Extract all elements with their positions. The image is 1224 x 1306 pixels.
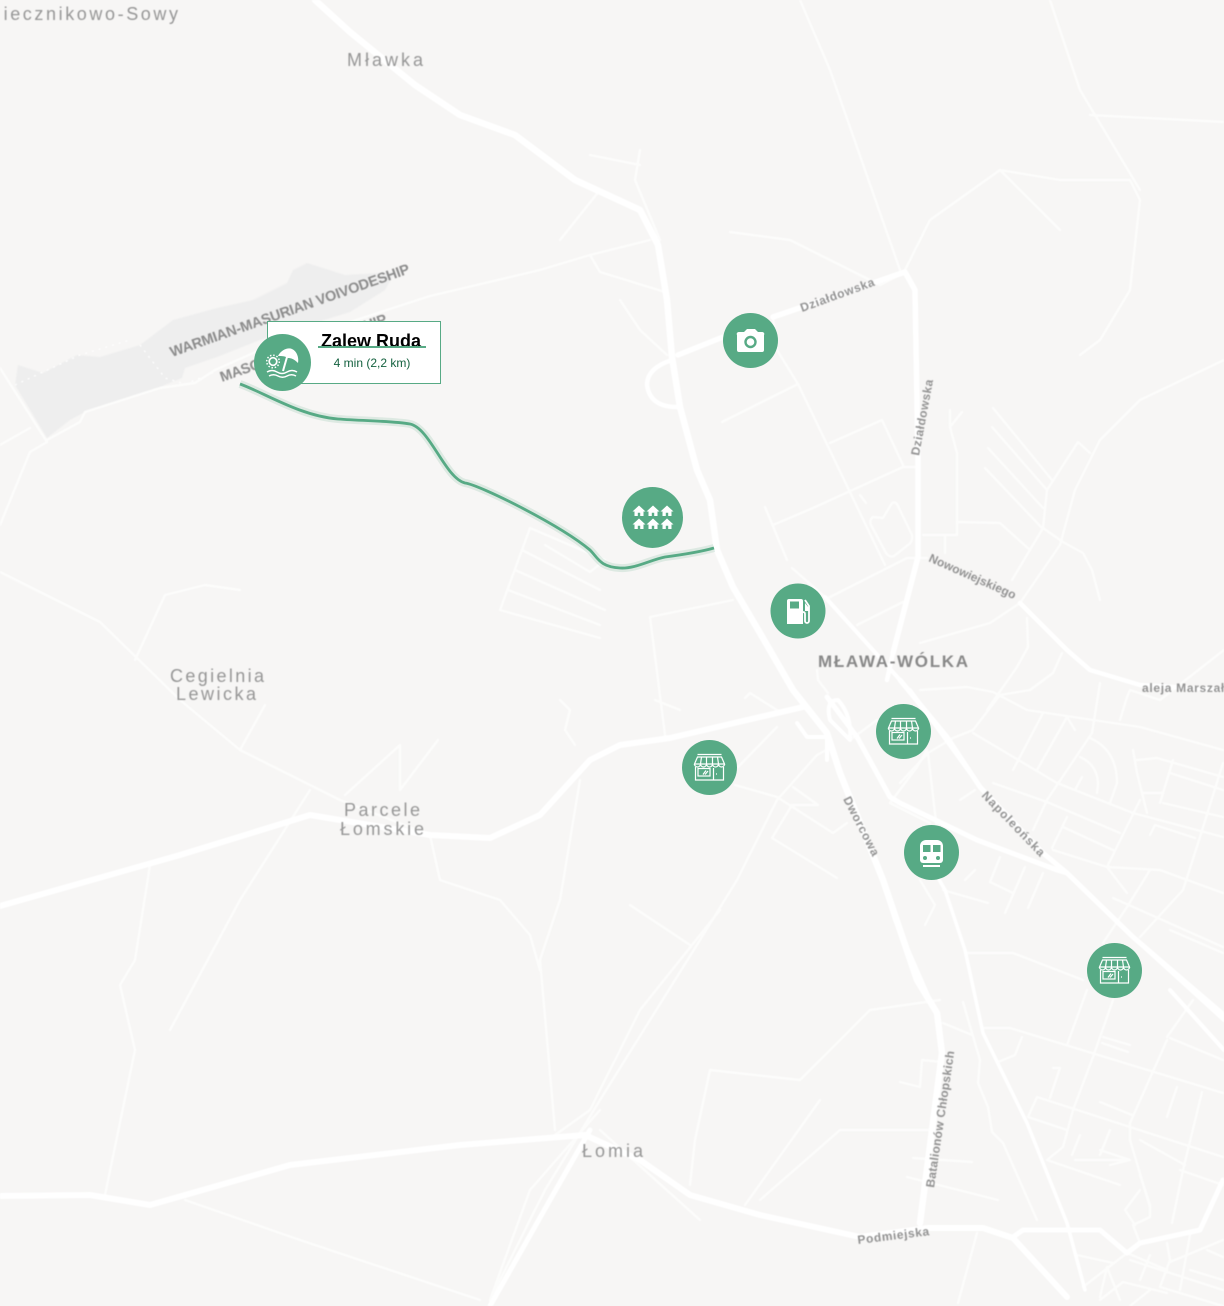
street labels: Nowowiejskiego: [927, 551, 1018, 602]
place labels: Parcele: [344, 800, 420, 820]
place labels: iiecznikowo-Sowy: [0, 4, 178, 24]
place labels: [0, 4, 968, 1161]
icon: train: [904, 825, 959, 880]
callout: Zalew Ruda: [267, 321, 441, 384]
place labels: Mławka: [347, 50, 424, 70]
icon: camera: [723, 313, 778, 368]
lake: [15, 263, 395, 438]
street labels: Podmiejska: [857, 1224, 930, 1247]
street labels: MASOVIAN VOIVODESHIP: [218, 312, 389, 386]
street labels: Dworcowa: [840, 794, 882, 859]
icon: shop 1: [682, 740, 737, 795]
street labels: Działdowska: [908, 378, 936, 457]
icon: beach umbrella: [254, 334, 311, 391]
icon: shop 3: [1087, 943, 1142, 998]
street labels: [168, 262, 1224, 1247]
place labels: Łomia: [582, 1141, 644, 1161]
place labels: Cegielnia: [170, 666, 265, 686]
icon: fuel station: [770, 584, 826, 638]
place labels: MŁAWA-WÓLKA: [818, 652, 968, 671]
callout underline: [318, 346, 426, 348]
place labels: Łomskie: [340, 819, 424, 839]
street labels: WARMIAN-MASURIAN VOIVODESHIP: [168, 262, 412, 361]
street labels: Batalionów Chłopskich: [923, 1050, 957, 1188]
street labels: Napoleońska: [979, 788, 1048, 859]
street labels: Działdowska: [798, 275, 877, 315]
place labels: Lewicka: [176, 684, 257, 704]
voivodeship boundary: [15, 340, 215, 385]
icon: houses: [622, 487, 683, 548]
callout title: Zalew Ruda: [321, 331, 421, 351]
icon: shop 2: [876, 704, 931, 759]
callout travel time: 4 min (2,2 km): [334, 356, 410, 370]
